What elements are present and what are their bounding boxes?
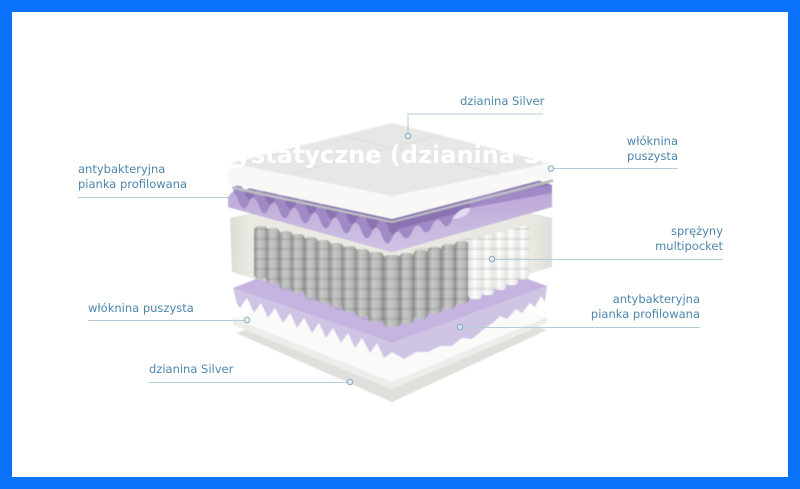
- label: włóknina puszysta top: włóknina: [627, 134, 678, 148]
- layer: lower fibre: [233, 295, 547, 389]
- label: włóknina puszysta bottom: [88, 301, 250, 323]
- label: sprężyny multipocket: multipocket: [655, 239, 723, 253]
- label: antybakteryjna pianka profilowana bottom: antybakteryjna: [613, 292, 700, 306]
- label: dzianina Silver top: [405, 94, 545, 139]
- label: antybakteryjna pianka profilowana top: antybakteryjna: [78, 162, 165, 176]
- label: sprężyny multipocket: sprężyny: [671, 224, 723, 238]
- label: włóknina puszysta top: [548, 134, 678, 171]
- label: włóknina puszysta bottom: włóknina puszysta: [88, 301, 194, 315]
- overlay title: white text: Antystatyczne (dzianina Silver): [188, 141, 612, 169]
- layer: top knit Silver: [230, 123, 550, 196]
- label: antybakteryjna pianka profilowana bottom: [457, 292, 700, 330]
- label: antybakteryjna pianka profilowana top: pianka profilowana: [78, 177, 187, 191]
- springs: white columns: [468, 226, 529, 299]
- layer: upper fibre: [226, 130, 553, 223]
- mattress cross-section: [226, 123, 553, 402]
- label: antybakteryjna pianka profilowana top: [78, 162, 228, 198]
- layer: bottom knit Silver: [236, 310, 547, 402]
- layer: lower profiled foam: [233, 262, 547, 359]
- springs: coil banding: [254, 226, 529, 327]
- layer: pocket spring core: [230, 211, 552, 327]
- label: dzianina Silver top: dzianina Silver: [460, 94, 545, 108]
- foam block behind springs: [230, 211, 552, 300]
- label: włóknina puszysta top: puszysta: [627, 149, 678, 163]
- layer: upper profiled foam: [228, 130, 552, 252]
- label: antybakteryjna pianka profilowana bottom: pianka profilowana: [591, 307, 700, 321]
- label: sprężyny multipocket: [489, 224, 723, 262]
- springs: grey columns: [254, 226, 469, 327]
- label: dzianina Silver bottom: [149, 362, 353, 385]
- label: dzianina Silver bottom: dzianina Silver: [149, 362, 234, 376]
